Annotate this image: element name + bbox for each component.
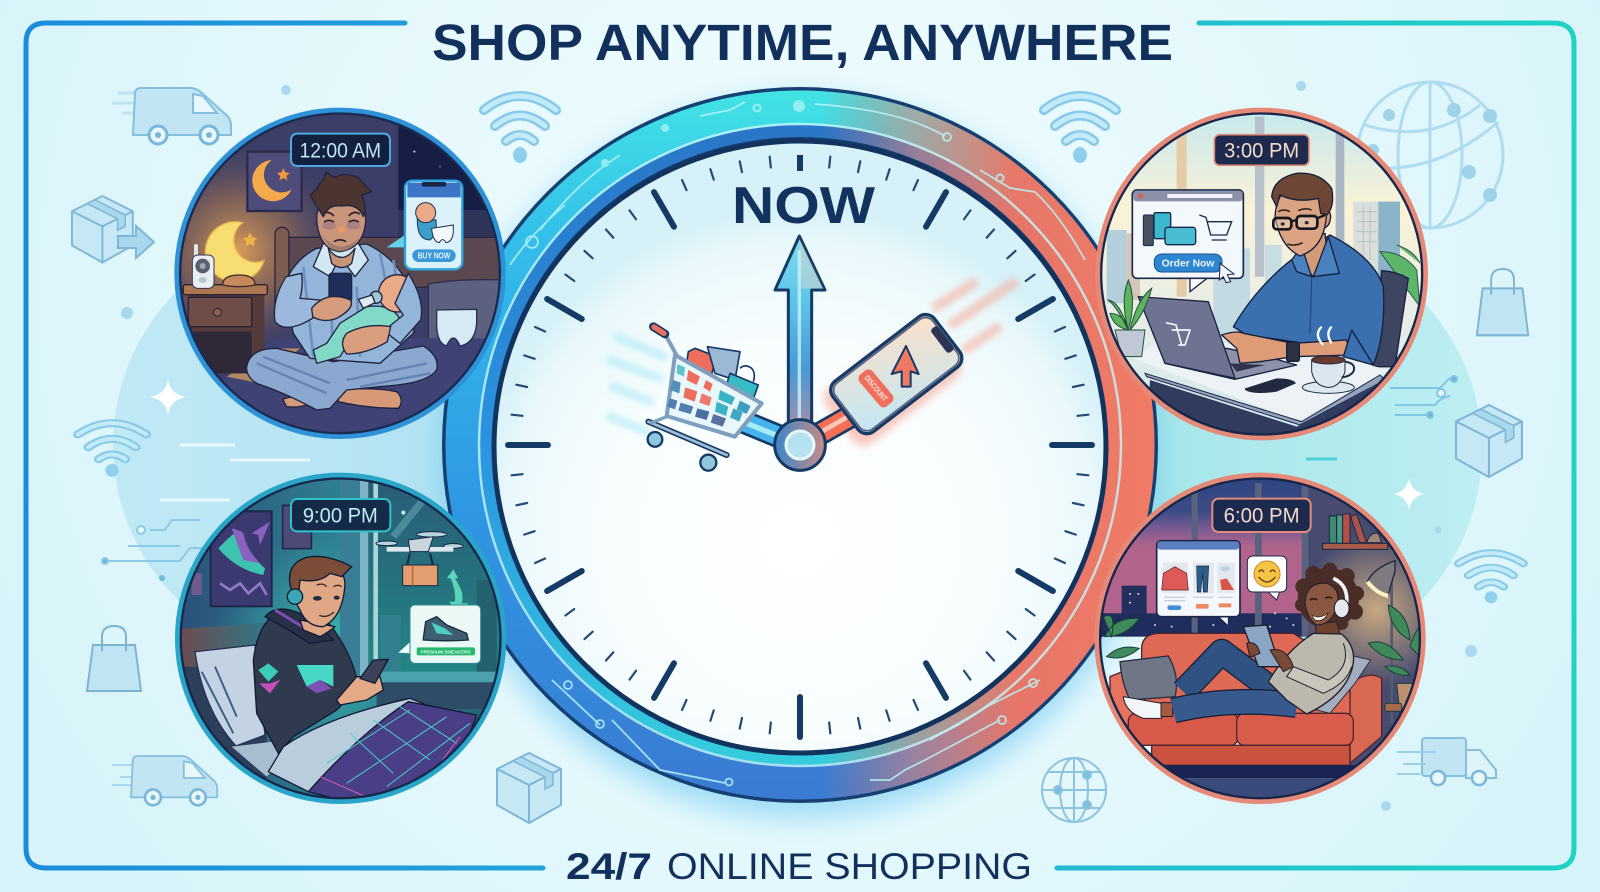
minute ticks <box>512 157 1088 733</box>
man in blue shirt <box>1233 173 1384 365</box>
icon: wifi top right <box>1044 96 1116 163</box>
product browser popup <box>1157 541 1240 626</box>
phone <box>826 310 966 438</box>
grey cushion <box>1120 656 1176 700</box>
phone glow <box>818 315 967 451</box>
icon: box with arrow <box>72 196 154 262</box>
phone popup <box>387 181 462 269</box>
emoji speech bubble <box>1247 556 1287 600</box>
hands on keyboard <box>1222 330 1373 365</box>
time badge: 6:00 PM <box>1224 504 1300 528</box>
flat leg <box>1173 702 1297 711</box>
plants <box>1103 605 1423 713</box>
scene ring <box>1098 110 1426 438</box>
coffee cup <box>1302 327 1354 393</box>
icon: delivery van bottom left <box>112 756 217 805</box>
phone on desk <box>1245 378 1296 393</box>
left hand arm <box>743 422 800 445</box>
laptop <box>1138 297 1297 379</box>
ring circuit traces <box>510 100 1085 786</box>
time badge: 9:00 PM <box>303 504 378 528</box>
cursor arrow <box>892 346 919 387</box>
diaper <box>437 309 477 346</box>
icon: shopping bag left <box>87 626 141 691</box>
bent leg <box>1183 652 1288 702</box>
icon: globe bottom <box>1042 758 1106 822</box>
sweater <box>1268 633 1354 714</box>
minute arrow <box>775 236 825 425</box>
posters <box>192 505 311 606</box>
footer heading: 24/7 <box>566 846 652 887</box>
time badge <box>291 499 390 531</box>
right background lobe <box>1048 233 1482 667</box>
sneaker popup <box>398 605 481 663</box>
icon: shopping bag right <box>1477 269 1528 335</box>
bookshelf <box>1323 514 1388 549</box>
browser popup: Order Now <box>1162 258 1215 269</box>
time badge: 3:00 PM <box>1224 139 1299 163</box>
sofa <box>1110 633 1382 765</box>
shopping cart <box>648 327 762 471</box>
footer heading: ONLINE SHOPPING <box>667 846 1032 887</box>
scene ring <box>177 475 504 802</box>
time badge <box>1214 135 1309 165</box>
left arm with phone <box>274 273 352 327</box>
clock face <box>494 141 1106 753</box>
blanket <box>268 698 477 807</box>
sock and foot <box>1123 697 1162 718</box>
phone popup: BUY NOW <box>418 251 451 260</box>
circuit lines right <box>1306 376 1457 459</box>
drone and parcel <box>376 532 463 586</box>
discount button <box>856 367 896 410</box>
skyline <box>1107 202 1400 335</box>
right hand arm <box>800 417 850 445</box>
icon: box right <box>1456 405 1522 477</box>
icon: wifi right <box>1459 553 1523 603</box>
window <box>368 480 512 709</box>
phone speed trails <box>937 283 1013 348</box>
scene: 3:00 PM <box>1093 110 1433 450</box>
hub <box>775 420 825 470</box>
man with pajamas <box>247 172 437 410</box>
circuit lines left <box>102 445 310 581</box>
swap arrow <box>446 570 468 604</box>
time badge: 12:00 AM <box>299 139 381 163</box>
wall art moon <box>247 152 302 211</box>
clock glow <box>440 98 1160 818</box>
headboard and pillow <box>182 623 267 778</box>
icon: sparkle right <box>1394 478 1424 510</box>
scene ring <box>1097 475 1423 802</box>
clock <box>440 87 1160 818</box>
young man with hoodie <box>253 556 477 807</box>
scene: 12:00 AM <box>174 108 506 439</box>
clock hands <box>610 236 1013 471</box>
cart speed trails <box>610 337 663 432</box>
pillow behind <box>1317 656 1371 713</box>
desk <box>1134 343 1388 434</box>
icon: delivery truck right <box>1397 738 1496 785</box>
icon: globe top right <box>1357 82 1503 228</box>
scene illustration <box>1093 473 1453 808</box>
scene ring <box>177 110 503 437</box>
scene: 9:00 PM <box>173 473 512 807</box>
scene illustration <box>181 114 499 432</box>
icon: box bottom <box>497 753 561 823</box>
curly hair <box>1295 563 1364 630</box>
time badge <box>1212 499 1311 532</box>
baby <box>313 273 422 363</box>
icon: sparkle left <box>150 379 186 415</box>
baby monitor <box>192 246 214 288</box>
tablet and hands <box>1243 625 1280 667</box>
discount button: DISCOUNT <box>863 374 889 403</box>
floor lamp <box>1367 561 1395 723</box>
decorative dots <box>121 81 1477 811</box>
headboard <box>274 226 499 306</box>
sneaker popup: PREMIUM SNEAKERS <box>421 649 471 655</box>
icon: wifi left <box>78 423 146 477</box>
city night skyline <box>1093 586 1307 637</box>
scene illustration <box>182 480 500 797</box>
plant left <box>1108 280 1152 357</box>
office chair <box>1373 271 1408 367</box>
scene illustration <box>1102 114 1421 434</box>
nightstand <box>183 285 267 373</box>
browser popup <box>1132 190 1243 292</box>
icon: wifi top left <box>484 96 556 163</box>
icon: delivery van top left <box>112 88 231 144</box>
time badge <box>291 134 390 166</box>
plant right <box>1380 245 1420 307</box>
left background lobe <box>113 228 547 662</box>
moon lamp <box>205 222 264 287</box>
NOW label: NOW <box>732 177 876 235</box>
scene: 6:00 PM <box>1093 473 1453 808</box>
hour ticks <box>508 155 1092 737</box>
title: SHOP ANYTIME, ANYWHERE <box>432 14 1173 71</box>
woman reading tablet <box>1123 563 1364 718</box>
clock ring <box>442 87 1158 803</box>
